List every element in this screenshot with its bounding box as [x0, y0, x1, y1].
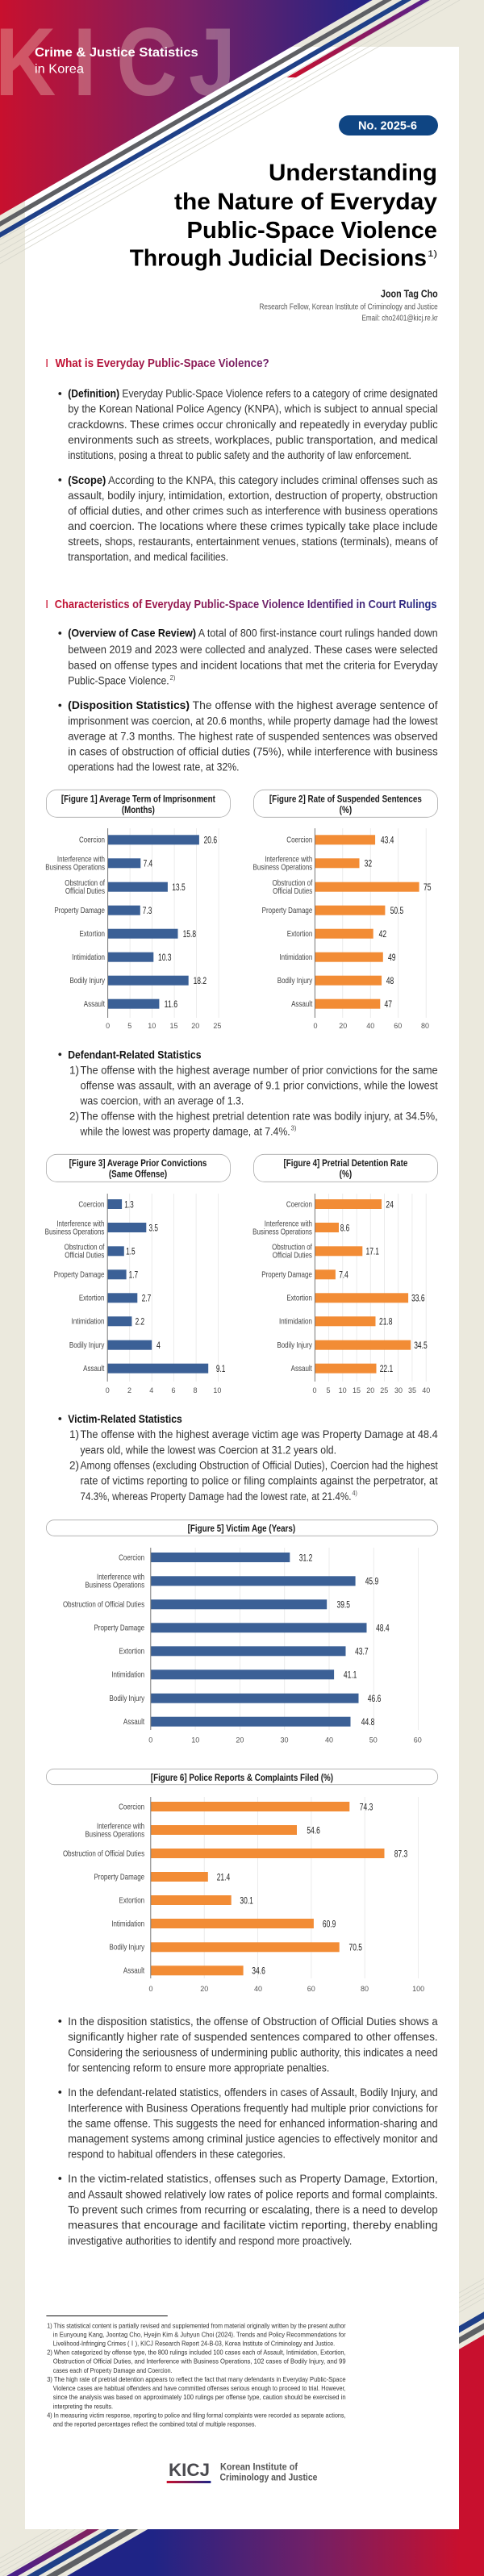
overview paragraph: [58, 627, 438, 686]
figure 3 title pill: [46, 1154, 230, 1182]
conclusion: defendant-related statistics: respond to habitual offenders in these categories.: [68, 2149, 286, 2161]
definition paragraph: institutions, posing a threat to public safety and the authority of law enforcement.: [68, 449, 411, 461]
KICJ footer logo: Korean Institute of: [220, 2461, 298, 2473]
figure 1 bar chart: 15: [169, 1022, 178, 1030]
figure 5 bar chart: 41.1: [344, 1669, 357, 1681]
figure 6 bar chart: Extortion: [119, 1896, 144, 1904]
watermark: KICJ: KICJ: [0, 7, 236, 116]
victim-related statistics: The offense with the highest average victim age was Property Damage at 48.4: [81, 1428, 438, 1440]
figure 6 bar chart: Coercion: [119, 1803, 144, 1811]
overview paragraph: between 2019 and 2023 were collected and analyzed. These cases were selected: [68, 644, 438, 656]
figure 1 bar chart: 7.3: [143, 905, 152, 916]
figure 4 title pill: (%): [340, 1169, 352, 1179]
conclusion: disposition statistics: for sentencing reform to ensure more appropriate penalties.: [68, 2061, 329, 2074]
conclusion: victim-related statistics: investigative authorities to identify and respond more proactively.: [68, 2235, 352, 2247]
figure 2 bar chart: 75: [424, 882, 432, 893]
main title: [130, 160, 437, 271]
figure 2 bar chart: Intimidation: [279, 952, 312, 961]
scope paragraph: transportation, and medical facilities.: [68, 551, 228, 563]
main title: the Nature of Everyday: [174, 189, 437, 215]
figure 5 bar chart: 45.9: [365, 1576, 378, 1587]
disposition statistics paragraph: operations had the lowest rate, at 32%.: [68, 761, 240, 773]
figure 4 bar chart: 15: [353, 1386, 361, 1394]
figure 4 bar chart: 0: [312, 1386, 317, 1394]
figure 2 bar chart: 0: [313, 1022, 318, 1030]
figure 2 bar chart: 60: [394, 1022, 402, 1030]
figure 4 bar chart: 20: [366, 1386, 374, 1394]
figure 3 bar chart: 2.2: [136, 1316, 144, 1328]
KICJ footer logo: Criminology and Justice: [219, 2472, 318, 2483]
figure 3 title pill: [Figure 3] Average Prior Convictions: [69, 1159, 207, 1169]
conclusion: disposition statistics: Considering the seriousness of undermining public authority, this indicates a need: [68, 2046, 438, 2058]
heading: What is Everyday Public-Space Violence?: What is Everyday Public-Space Violence?: [55, 357, 269, 370]
footer banner: gradient and stripes: [0, 2278, 484, 2576]
scope paragraph: assault, bodily injury, intimidation, extortion, destruction of property, obstruction: [68, 490, 438, 502]
figure 5 title pill: [46, 1520, 438, 1536]
figure 4 bar chart: Coercion: [286, 1200, 312, 1208]
figure 4 title pill: [254, 1154, 438, 1182]
figure 1 bar chart: 0: [106, 1022, 110, 1030]
figure 6 bar chart: 21.4: [217, 1871, 230, 1882]
figure 1 bar chart: 13.5: [172, 882, 186, 893]
figure 4 bar chart: Intimidation: [279, 1317, 312, 1326]
figure 1 bar chart: 7.4: [144, 858, 152, 869]
definition paragraph: [58, 388, 438, 461]
figure 3 bar chart: Bodily Injury: [69, 1340, 105, 1349]
figure 6 bar chart: Business Operations: [85, 1830, 145, 1838]
figure 4 bar chart: 40: [422, 1386, 430, 1394]
figure 4 bar chart: 34.5: [414, 1340, 428, 1351]
figure 2 title pill: (%): [340, 806, 352, 815]
figure 6 bar chart: Intimidation: [111, 1919, 144, 1928]
figure 4 bar chart: 35: [408, 1386, 416, 1394]
figure 3 bar chart: 3.5: [148, 1222, 158, 1233]
figure 5 bar chart: 39.5: [337, 1599, 350, 1611]
figure 4 bar chart: 8.6: [340, 1222, 349, 1233]
figure 5 bar chart: Bodily Injury: [110, 1694, 145, 1703]
figure 1 bar chart: Coercion: [79, 836, 105, 844]
figure 5 bar chart: 40: [325, 1736, 333, 1744]
figure 4 bar chart: 25: [380, 1386, 388, 1394]
conclusion: victim-related statistics: [58, 2173, 438, 2247]
figure 5 bar chart: 60: [414, 1736, 422, 1744]
figure 2 title pill: [Figure 2] Rate of Suspended Sentences: [269, 795, 422, 805]
overview paragraph: 2): [169, 674, 176, 682]
defendant-related statistics: [58, 1048, 438, 1138]
figure 5 bar chart: Obstruction of Official Duties: [63, 1600, 145, 1609]
figure 3 bar chart: Coercion: [78, 1200, 104, 1208]
victim-related statistics: 1): [69, 1428, 79, 1440]
KICJ footer logo: [167, 2460, 318, 2483]
figure 1 bar chart: [45, 828, 221, 1030]
main title: 1): [428, 249, 437, 259]
figure 2 bar chart: Business Operations: [253, 863, 313, 872]
conclusion: defendant-related statistics: [58, 2086, 438, 2161]
figure 1 bar chart: Interference with: [57, 855, 105, 864]
figure 4 bar chart: 30: [394, 1386, 403, 1394]
figure 2 bar chart: 80: [421, 1022, 429, 1030]
footnotes: interpreting the results.: [53, 2402, 113, 2410]
defendant-related statistics: 3): [290, 1125, 297, 1132]
figure 2 bar chart: 47: [384, 998, 392, 1010]
conclusion: victim-related statistics: and Assault showed relatively low rates of police reports and formal complaints.: [68, 2188, 438, 2200]
conclusion: victim-related statistics: In the victim-related statistics, offenses such as Property Damage, Extortion,: [68, 2173, 438, 2185]
figure 1 bar chart: Property Damage: [54, 906, 105, 915]
figure 1 bar chart: Official Duties: [65, 886, 105, 895]
figure 3 bar chart: 2: [127, 1386, 131, 1394]
figure 1 bar chart: Bodily Injury: [69, 976, 106, 985]
figure 4 bar chart: Extortion: [286, 1294, 312, 1303]
defendant-related statistics: Defendant-Related Statistics: [68, 1048, 202, 1061]
figure 1 bar chart: 10.3: [158, 952, 172, 963]
footnotes: [46, 2315, 346, 2428]
figure 2 title pill: [254, 790, 438, 817]
figure 3 bar chart: 1.3: [124, 1198, 134, 1210]
figure 3 bar chart: Property Damage: [54, 1270, 104, 1279]
figure 6 bar chart: Interference with: [97, 1822, 144, 1830]
main title: Through Judicial Decisions: [130, 245, 427, 271]
figure 4 bar chart: 7.4: [339, 1269, 348, 1281]
figure 5 bar chart: Extortion: [119, 1647, 144, 1656]
figure 1 bar chart: 10: [148, 1022, 156, 1030]
scope paragraph: of official duties, and other crimes such as interference with business operations: [68, 505, 438, 517]
victim-related statistics: [58, 1413, 438, 1503]
footnotes: since the analysis was based on approximately 100 rulings per offense type, caution should be exercised in: [53, 2393, 346, 2401]
figure 1 bar chart: 5: [127, 1022, 131, 1030]
figure 2 bar chart: 32: [365, 858, 372, 869]
overview paragraph: Public-Space Violence.: [68, 674, 169, 686]
victim-related statistics: rate of victims reporting to police or filing complaints against the perpetrator, at: [81, 1475, 438, 1487]
conclusion: defendant-related statistics: the same offense. This suggests the need for enhanced information-sharing and: [68, 2117, 438, 2129]
figure 3 bar chart: Extortion: [79, 1294, 104, 1303]
figure 2 bar chart: 40: [366, 1022, 374, 1030]
figure 2 bar chart: 48: [386, 975, 394, 986]
victim-related statistics: 74.3%, whereas Property Damage had the lowest rate, at 21.4%.: [81, 1490, 352, 1503]
figure 6 bar chart: 40: [254, 1985, 262, 1993]
figure 4 bar chart: Obstruction of: [272, 1243, 312, 1252]
figure 5 bar chart: 31.2: [299, 1552, 313, 1563]
footnotes: cases each of Property Damage and Coercion.: [53, 2366, 173, 2374]
issue number badge: No. 2025-6: [358, 119, 417, 133]
footnotes: Obstruction of Official Duties, and Interference with Business Operations, 102 cases of Bodily Injury, and 99: [53, 2357, 346, 2366]
figure 4 bar chart: 33.6: [411, 1293, 425, 1304]
figure 5 bar chart: 46.6: [368, 1693, 382, 1704]
heading: Characteristics: Characteristics of Everyday Public-Space Violence Identified in Court Rulings: [55, 598, 436, 611]
scope paragraph: and coercion. The locations where these crimes typically take place include: [68, 520, 438, 532]
figure 6 bar chart: Obstruction of Official Duties: [63, 1849, 145, 1857]
figure 6 bar chart: Assault: [123, 1966, 145, 1975]
footnotes: in Eunyoung Kang, Joontag Cho, Hyejin Kim & Juhyun Choi (2024). Trends and Policy Recommendations for: [53, 2330, 346, 2338]
author block: [260, 288, 438, 323]
figure 5 bar chart: 48.4: [376, 1623, 390, 1634]
conclusion: defendant-related statistics: Interference with Business Operations frequently had multiple prior convictions for: [68, 2102, 438, 2114]
figure 3 bar chart: 4: [156, 1340, 161, 1351]
figure 5 title pill: [Figure 5] Victim Age (Years): [188, 1524, 295, 1534]
conclusion: disposition statistics: significantly higher rate of suspended sentences compared to other offenses.: [68, 2031, 438, 2043]
author block: Email: cho2401@kicj.re.kr: [361, 314, 438, 323]
figure 2 bar chart: Bodily Injury: [277, 976, 313, 985]
victim-related statistics: years old, while the lowest was Coercion at 31.2 years old.: [81, 1444, 336, 1456]
defendant-related statistics: 2): [69, 1111, 79, 1123]
figure 3 bar chart: 4: [149, 1386, 153, 1394]
defendant-related statistics: while the lowest was property damage, at 7.4%.: [80, 1126, 290, 1138]
figure 3 bar chart: Interference with: [56, 1219, 104, 1228]
figure 2 bar chart: Coercion: [286, 836, 312, 844]
footnotes: 4) In measuring victim response, reporting to police and filing formal complaints were recorded as separate actions,: [47, 2411, 346, 2419]
figure 2 bar chart: [253, 828, 432, 1030]
figure 6 bar chart: Property Damage: [94, 1873, 144, 1881]
figure 5 bar chart: Interference with: [97, 1573, 144, 1582]
figure 1 bar chart: Obstruction of: [65, 878, 105, 887]
figure 2 bar chart: 50.5: [390, 905, 403, 916]
figure 2 bar chart: Assault: [291, 999, 313, 1008]
figure 4 bar chart: Property Damage: [261, 1270, 312, 1279]
figure 4 bar chart: Bodily Injury: [277, 1340, 312, 1349]
figure 6 bar chart: [63, 1797, 424, 1993]
series title: [35, 46, 198, 77]
figure 2 bar chart: Obstruction of: [273, 878, 313, 887]
figure 5 bar chart: Coercion: [119, 1553, 144, 1561]
figure 5 bar chart: 50: [369, 1736, 378, 1744]
figure 2 bar chart: Extortion: [287, 929, 312, 938]
figure 3 bar chart: 10: [213, 1386, 221, 1394]
figure 3 bar chart: 0: [106, 1386, 110, 1394]
disposition statistics paragraph: (Disposition Statistics) The offense with the highest average sentence of: [68, 699, 438, 711]
figure 1 bar chart: Extortion: [79, 929, 105, 938]
figure 2 bar chart: 42: [379, 928, 386, 940]
figure 3 bar chart: 2.7: [142, 1293, 151, 1304]
figure 3 bar chart: 9.1: [216, 1363, 226, 1374]
conclusion: disposition statistics: In the disposition statistics, the offense of Obstruction of Official Duties shows a: [68, 2015, 438, 2028]
figure 3 title pill: (Same Offense): [109, 1169, 167, 1179]
figure 5 bar chart: Business Operations: [85, 1581, 145, 1590]
conclusion: victim-related statistics: measures that encourage and facilitate victim reporting, thereby enabling: [68, 2220, 438, 2232]
figure 5 bar chart: 0: [148, 1736, 152, 1744]
figure 1 bar chart: 20.6: [204, 835, 217, 846]
series title: in Korea: [35, 63, 84, 77]
figure 6 bar chart: 60.9: [323, 1918, 336, 1929]
author block: Joon Tag Cho: [381, 288, 438, 299]
conclusion: disposition statistics: [58, 2015, 438, 2074]
figure 4 bar chart: Interference with: [265, 1219, 312, 1228]
figure 1 bar chart: 11.6: [165, 998, 177, 1010]
conclusion: victim-related statistics: To prevent such crimes from recurring or escalating, there is a need to develop: [68, 2203, 438, 2215]
victim-related statistics: Victim-Related Statistics: [68, 1413, 182, 1425]
main title: Public-Space Violence: [187, 218, 437, 244]
figure 4 bar chart: Business Operations: [252, 1228, 312, 1236]
figure 6 bar chart: Bodily Injury: [110, 1943, 145, 1952]
figure 3 bar chart: Official Duties: [65, 1251, 105, 1260]
figure 3 bar chart: 6: [171, 1386, 176, 1394]
victim-related statistics: 2): [69, 1459, 79, 1471]
figure 2 bar chart: 20: [339, 1022, 347, 1030]
figure 3 bar chart: 8: [193, 1386, 198, 1394]
figure 5 bar chart: Assault: [123, 1717, 145, 1726]
figure 5 bar chart: 20: [236, 1736, 244, 1744]
disposition statistics paragraph: [58, 699, 438, 773]
figure 4 bar chart: 21.8: [379, 1316, 393, 1328]
figure 6 title pill: [Figure 6] Police Reports & Complaints Filed (%): [151, 1774, 333, 1783]
figure 2 bar chart: 43.4: [381, 835, 394, 846]
definition paragraph: by the Korean National Police Agency (KNPA), which is subject to annual special: [68, 403, 438, 415]
figure 6 title pill: [46, 1769, 438, 1785]
footnotes: 3) The high rate of pretrial detention appears to reflect the fact that many defendants in Everyday Public-Space: [47, 2375, 346, 2383]
figure 5 bar chart: 10: [191, 1736, 199, 1744]
defendant-related statistics: offense was assault, with an average of 9.1 prior convictions, while the lowest: [81, 1079, 438, 1091]
figure 4 bar chart: 17.1: [366, 1246, 379, 1257]
disposition statistics paragraph: imprisonment was coercion, at 20.6 months, while property damage had the lowest: [68, 715, 438, 727]
conclusion: defendant-related statistics: In the defendant-related statistics, offenders in cases of Assault, Bodily Injury, and: [68, 2086, 438, 2099]
figure 1 title pill: (Months): [122, 806, 155, 815]
figure 6 bar chart: 87.3: [394, 1848, 407, 1859]
figure 5 bar chart: [63, 1548, 422, 1744]
figure 4 bar chart: [252, 1194, 430, 1394]
defendant-related statistics: was coercion, with an average of 1.3.: [80, 1095, 244, 1107]
figure 1 bar chart: Intimidation: [72, 952, 105, 961]
defendant-related statistics: The offense with the highest average number of prior convictions for the same: [81, 1064, 438, 1076]
footnotes: 1) This statistical content is partially revised and supplemented from material originally written by the present author: [47, 2321, 346, 2329]
victim-related statistics: Among offenses (excluding Obstruction of Official Duties), Coercion had the highest: [81, 1459, 438, 1471]
overview paragraph: based on offense types and incident locations that met the criteria for Everyday: [68, 659, 438, 671]
issue number badge: [339, 115, 438, 135]
figure 5 bar chart: Intimidation: [111, 1670, 144, 1679]
figure 1 bar chart: 25: [213, 1022, 221, 1030]
author block: Research Fellow, Korean Institute of Criminology and Justice: [260, 302, 438, 311]
defendant-related statistics: 1): [69, 1064, 79, 1076]
figure 3 bar chart: [45, 1194, 226, 1394]
figure 6 bar chart: 30.1: [240, 1894, 253, 1906]
figure 4 bar chart: Assault: [291, 1364, 312, 1373]
footnotes: and the reported percentages reflect the combined total of multiple responses.: [53, 2420, 257, 2428]
scope paragraph: [58, 474, 438, 563]
defendant-related statistics: The offense with the highest pretrial detention rate was bodily injury, at 34.5%,: [81, 1111, 438, 1123]
figure 6 bar chart: 100: [412, 1985, 424, 1993]
figure 1 bar chart: Assault: [84, 999, 105, 1008]
figure 5 bar chart: 30: [280, 1736, 289, 1744]
definition paragraph: environments such as streets, workplaces, public transportation, and medical: [68, 434, 438, 446]
definition paragraph: (Definition) Everyday Public-Space Violence refers to a category of crime designated: [68, 388, 438, 400]
figure 6 bar chart: 74.3: [360, 1801, 373, 1812]
figure 2 bar chart: Property Damage: [262, 906, 312, 915]
figure 6 bar chart: 54.6: [307, 1824, 320, 1836]
figure 6 bar chart: 34.6: [252, 1965, 265, 1977]
victim-related statistics: 4): [352, 1490, 357, 1497]
figure 6 bar chart: 60: [307, 1985, 315, 1993]
scope paragraph: streets, shops, restaurants, entertainment venues, stations (terminals), means of: [68, 536, 438, 548]
figure 3 bar chart: Assault: [83, 1364, 105, 1373]
conclusion: defendant-related statistics: management systems among criminal justice agencies to effectively monitor and: [68, 2133, 438, 2145]
figure 1 title pill: [46, 790, 230, 817]
figure 6 bar chart: 0: [148, 1985, 153, 1993]
overview paragraph: (Overview of Case Review) A total of 800 first-instance court rulings handed down: [68, 627, 438, 639]
figure 6 bar chart: 70.5: [348, 1942, 362, 1953]
figure 6 bar chart: 80: [361, 1985, 369, 1993]
figure 1 bar chart: 15.8: [183, 928, 196, 940]
figure 4 bar chart: 5: [326, 1386, 331, 1394]
main title: Understanding: [269, 160, 437, 185]
definition paragraph: crackdowns. These crimes occur chronically and repeatedly in everyday public: [68, 419, 438, 431]
figure 1 bar chart: 18.2: [194, 975, 207, 986]
figure 1 bar chart: 20: [191, 1022, 199, 1030]
figure 4 title pill: [Figure 4] Pretrial Detention Rate: [283, 1159, 407, 1169]
footnotes: Violence cases are habitual offenders and have committed offenses serious enough to proceed to trial. However,: [53, 2384, 346, 2392]
figure 3 bar chart: Obstruction of: [65, 1243, 105, 1252]
figure 3 bar chart: Business Operations: [45, 1228, 105, 1236]
disposition statistics paragraph: in cases of obstruction of official duties (75%), while interference with business: [68, 746, 438, 758]
figure 4 bar chart: 10: [339, 1386, 347, 1394]
figure 2 bar chart: 49: [388, 952, 396, 963]
figure 6 bar chart: 20: [200, 1985, 208, 1993]
figure 1 title pill: [Figure 1] Average Term of Imprisonment: [61, 795, 215, 805]
KICJ footer logo: KICJ: [169, 2460, 210, 2480]
figure 3 bar chart: 1.7: [129, 1269, 138, 1281]
figure 5 bar chart: 43.7: [355, 1646, 369, 1657]
figure 3 bar chart: 1.5: [126, 1246, 136, 1257]
footnotes: 2) When categorized by offense type, the 800 rulings included 100 cases each of Assault, Intimidation, Extortion,: [47, 2349, 346, 2357]
figure 4 bar chart: Official Duties: [273, 1251, 312, 1260]
figure 5 bar chart: Property Damage: [94, 1624, 144, 1632]
figure 1 bar chart: Business Operations: [45, 863, 106, 872]
figure 4 bar chart: 22.1: [380, 1363, 393, 1374]
figure 2 bar chart: Official Duties: [273, 886, 313, 895]
footnotes: Livelihood-Infringing Crimes (Ⅰ), KICJ Research Report 24-B-03, Korea Institute of Criminology and Justice.: [53, 2339, 335, 2347]
header banner: gradient, watermark, series title, stripes: [0, 0, 460, 264]
scope paragraph: (Scope) According to the KNPA, this category includes criminal offenses such as: [68, 474, 438, 486]
figure 3 bar chart: Intimidation: [72, 1317, 104, 1326]
series title: Crime & Justice Statistics: [35, 46, 198, 60]
figure 4 bar chart: 24: [386, 1198, 394, 1210]
figure 2 bar chart: Interference with: [265, 855, 312, 864]
figure 5 bar chart: 44.8: [361, 1716, 375, 1728]
disposition statistics paragraph: average at 7.3 months. The highest rate of suspended sentences was observed: [68, 731, 438, 743]
